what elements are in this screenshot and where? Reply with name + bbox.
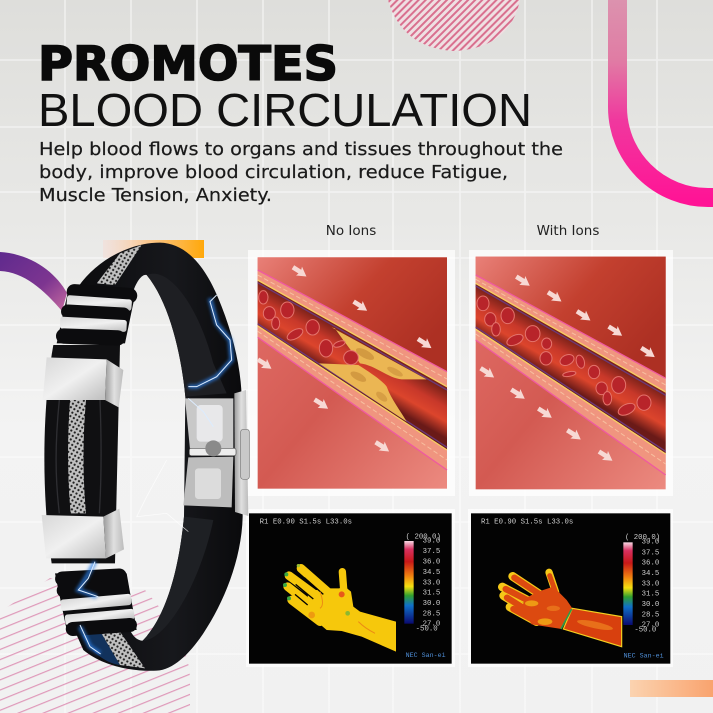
- color scale: 39.0: [423, 537, 440, 545]
- color scale: -50.0: [634, 627, 656, 635]
- flow arrows: [255, 263, 435, 455]
- decoration: striped pink lines bottom left: [0, 570, 195, 713]
- plaque: [319, 327, 427, 422]
- color scale: 36.0: [423, 558, 440, 566]
- lower band blue glow patch: [80, 628, 120, 665]
- color scale: 28.5: [423, 611, 440, 619]
- decoration: peach bar bottom right: [630, 680, 713, 697]
- color scale: 36.0: [642, 560, 659, 568]
- clasp: [183, 390, 249, 516]
- artery wall lower: [476, 328, 666, 475]
- label: with ions: With Ions: [537, 223, 599, 239]
- center mesh strip: [68, 400, 86, 513]
- lower silver slide: [42, 509, 124, 558]
- brand text: NEC San-ei: [624, 652, 664, 660]
- color scale: [623, 534, 660, 635]
- color scale: 27.0: [642, 622, 659, 630]
- color scale: 27.0: [423, 621, 440, 629]
- hand: yellow: [283, 564, 396, 652]
- color scale: ( 200.0): [625, 534, 660, 542]
- hand: red-orange: [502, 572, 622, 647]
- color scale: 33.0: [642, 580, 659, 588]
- lightning glow: [78, 298, 232, 653]
- lumen: [476, 284, 666, 453]
- label: no ions: No Ions: [326, 223, 376, 239]
- color scale: 34.5: [642, 570, 659, 578]
- color scale: 31.5: [642, 591, 659, 599]
- color scale: 31.5: [423, 590, 440, 598]
- color scale: 34.5: [423, 569, 440, 577]
- title: [38, 37, 532, 136]
- brand text: NEC San-ei: [406, 651, 446, 659]
- color scale: ( 200.0): [406, 533, 441, 541]
- lightning bolts: [78, 295, 232, 654]
- top rings: [56, 284, 138, 346]
- red blood cells: [259, 291, 358, 365]
- thermal header text: R1 E0.90 S1.5s L33.0s: [481, 519, 573, 527]
- color scale: 30.0: [423, 600, 440, 608]
- lumen: [258, 281, 447, 450]
- finger gaps: [295, 578, 323, 605]
- panel: thermal image with ions: [471, 513, 670, 664]
- color scale: 30.0: [642, 601, 659, 609]
- color scale: 39.0: [642, 539, 659, 547]
- red blood cells: [477, 296, 651, 418]
- flow arrows: [478, 272, 658, 465]
- decoration: orange bar behind bracelet: [103, 240, 204, 258]
- upper mesh band: [97, 245, 142, 285]
- color scale: [404, 533, 441, 633]
- panel cards behind images: [246, 250, 673, 667]
- title line: blood circulation: BLOOD CIRCULATION: [38, 84, 532, 136]
- upper background: [476, 257, 666, 378]
- bracelet photo illustration: [42, 243, 249, 671]
- panel: thermal image without ions: [249, 513, 452, 664]
- thermal header text: R1 E0.90 S1.5s L33.0s: [260, 519, 352, 527]
- title line: promotes: PROMOTES: [38, 37, 338, 92]
- color scale: 37.5: [642, 549, 659, 557]
- color scale: 33.0: [423, 579, 440, 587]
- color scale: -50.0: [416, 625, 438, 633]
- description text: Muscle Tension, Anxiety.: [39, 185, 272, 206]
- description text: body, improve blood circulation, reduce Fatigue,: [39, 162, 508, 183]
- artery wall upper: [476, 275, 666, 392]
- upper background: [258, 257, 447, 373]
- upper silver slide: [43, 357, 123, 407]
- panel: artery without ions: [255, 257, 447, 489]
- description text: [39, 139, 563, 206]
- artery wall upper: [258, 270, 447, 387]
- artery wall lower: [258, 325, 447, 470]
- bottom rings: [55, 568, 137, 636]
- decoration: pink curved line top right: [618, 0, 713, 198]
- rubber band: [70, 243, 243, 671]
- center black bar: [44, 345, 120, 563]
- color scale: 28.5: [642, 612, 659, 620]
- lower mesh band: [98, 628, 145, 668]
- decoration: purple arc left: [0, 252, 67, 311]
- color scale: 37.5: [423, 548, 440, 556]
- panel: artery with ions: [476, 257, 666, 489]
- decoration: top striped pink semicircle: [388, 0, 520, 51]
- description text: Help blood flows to organs and tissues throughout the: [39, 139, 563, 160]
